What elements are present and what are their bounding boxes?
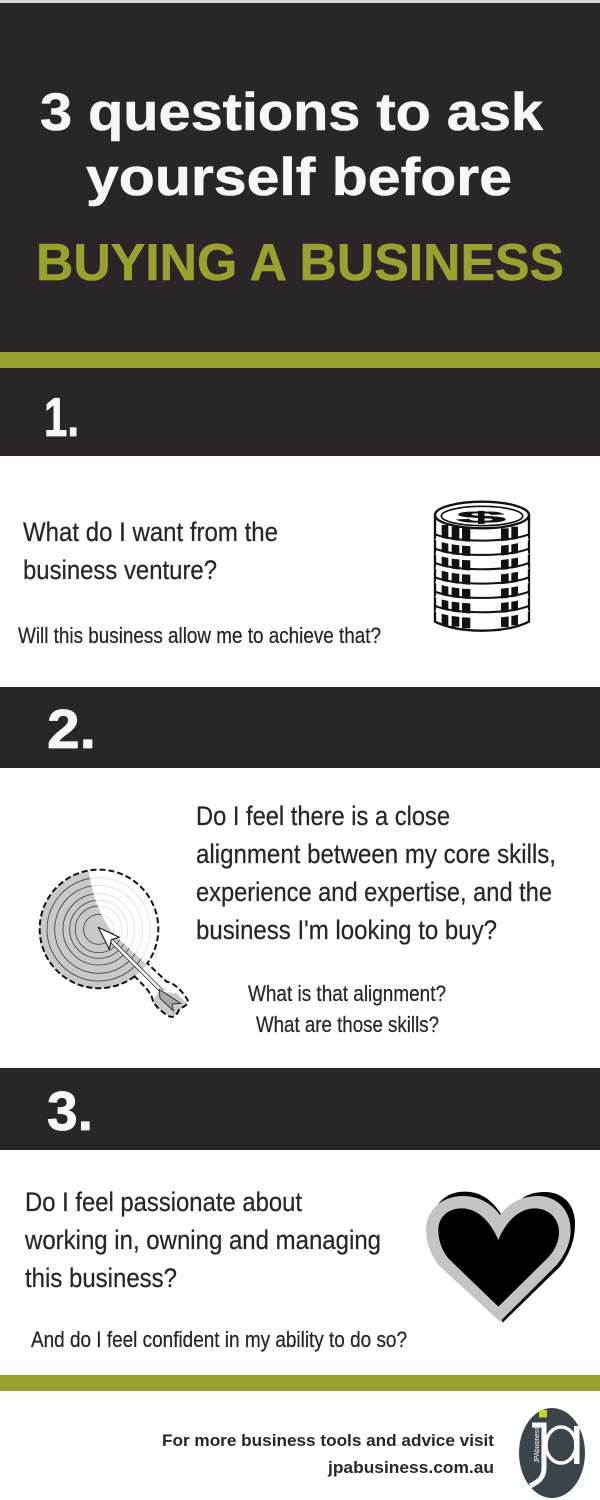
title: 3 questions to ask — [40, 83, 544, 142]
panel: question 3 text: working in, owning and managing — [24, 1225, 381, 1255]
panel: question 3 text: And do I feel confident in my ability to do so? — [31, 1327, 407, 1352]
panel: number 1 banner: 1. — [44, 386, 79, 448]
icon: coin stack: $ — [456, 508, 506, 526]
panel: question 1 text: What do I want from the — [23, 517, 278, 547]
footer text: jpabusiness.com.au — [327, 1458, 494, 1477]
panel: question 2 text: business I'm looking to buy? — [196, 915, 497, 945]
icon: JPA logo: JPAbusiness — [534, 1427, 541, 1463]
panel: number 1 banner — [0, 368, 600, 456]
icon: coin stack — [435, 502, 529, 631]
panel: number 3 banner: 3. — [47, 1080, 93, 1142]
panel: number 3 banner — [0, 1068, 600, 1150]
panel: question 3 text — [24, 1187, 407, 1352]
title: yourself before — [86, 148, 512, 207]
green divider — [0, 1375, 600, 1391]
icon: heart — [426, 1192, 575, 1323]
panel: question 2 text: What are those skills? — [256, 1012, 439, 1037]
panel: question 2 text: Do I feel there is a close — [196, 801, 450, 831]
panel: question 1 text — [18, 517, 381, 648]
panel: question 2 text: alignment between my core skills, — [196, 839, 556, 869]
panel: question 1 text: Will this business allow me to achieve that? — [18, 623, 381, 648]
title — [36, 83, 564, 292]
panel: question 3 text: this business? — [25, 1263, 177, 1293]
panel: question 2 text — [196, 801, 556, 1037]
footer text — [162, 1431, 494, 1477]
green divider — [0, 352, 600, 368]
panel: question 3 text: Do I feel passionate about — [25, 1187, 303, 1217]
panel: question 2 text: What is that alignment? — [248, 981, 446, 1006]
panel: number 2 banner: 2. — [47, 698, 96, 760]
panel: question 1 text: business venture? — [23, 555, 217, 585]
panel: header — [0, 3, 600, 352]
panel: question 2 text: experience and expertise, and the — [196, 877, 552, 907]
title: BUYING A BUSINESS — [36, 234, 564, 292]
footer text: For more business tools and advice visit — [162, 1431, 494, 1450]
panel: number 2 banner — [0, 687, 600, 768]
icon: target with arrow — [39, 870, 188, 1018]
icon: JPA logo — [519, 1408, 585, 1498]
